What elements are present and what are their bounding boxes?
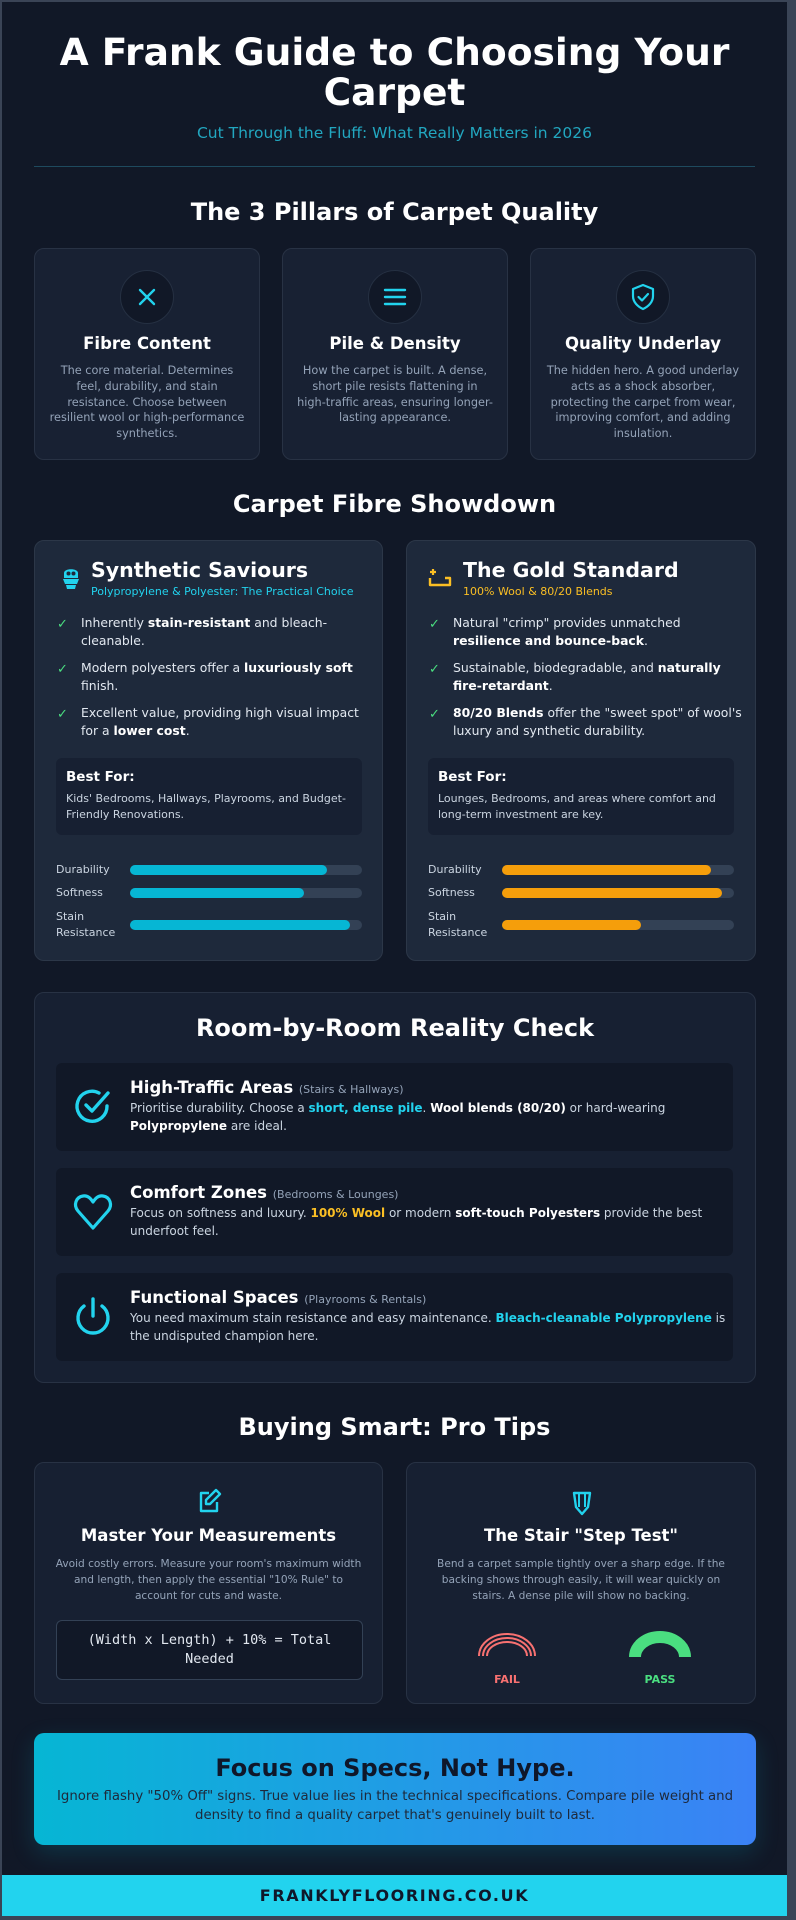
- best for: [56, 758, 362, 835]
- row: functional: Functional Spaces (Playrooms & Rentals): [130, 1288, 426, 1307]
- panel: measurements: [34, 1462, 383, 1704]
- callout: [34, 1733, 756, 1845]
- panel: gold standard: The Gold Standard: [463, 558, 679, 582]
- panel: gold standard: 80/20 Blends offer the "sweet spot" of wool's luxury and synthetic durability.: [453, 705, 742, 738]
- icon: power: [76, 1297, 110, 1335]
- panel: synthetic: Polypropylene & Polyester: The Practical Choice: [91, 585, 353, 598]
- panel: step test: The Stair "Step Test": [484, 1526, 678, 1545]
- subtitle: Cut Through the Fluff: What Really Matters in 2026: [197, 124, 592, 142]
- title: [60, 30, 730, 114]
- row: comfort: [56, 1168, 733, 1256]
- bar chart: synthetic: Softness: [56, 886, 103, 899]
- panel: room by room: [34, 992, 756, 1383]
- panel: gold standard: [406, 540, 756, 961]
- icon: lines: [368, 270, 422, 324]
- icon: heart: [74, 1194, 112, 1230]
- icon: fail arc: FAIL: [494, 1673, 520, 1686]
- heading: Room-by-Room Reality Check: [196, 1014, 594, 1042]
- best for: [428, 758, 734, 835]
- icon: edit: [200, 1488, 222, 1512]
- row: high traffic: [56, 1063, 733, 1151]
- card: pile density: Pile & Density: [329, 334, 461, 353]
- icon: shield: [616, 270, 670, 324]
- bar chart: wool: Softness: [428, 886, 475, 899]
- row: comfort: Comfort Zones (Bedrooms & Lounges): [130, 1183, 398, 1202]
- panel: synthetic: Inherently stain-resistant and bleach-cleanable.: [81, 615, 327, 648]
- best for: Best For:: [66, 769, 135, 785]
- row: high traffic: Prioritise durability. Choose a short, dense pile. Wool blends (80/20) or hard-wearing Polypropylene are ideal.: [130, 1101, 665, 1133]
- row: comfort: Focus on softness and luxury. 100% Wool or modern soft-touch Polyesters provide the best underfoot feel.: [130, 1206, 702, 1238]
- card: pile density: How the carpet is built. A dense, short pile resists flattening in high-traffic areas, ensuring longer-lasting appearance.: [297, 364, 493, 424]
- panel: gold standard: Sustainable, biodegradable, and naturally fire-retardant.: [453, 660, 721, 693]
- icon: pass arc: PASS: [645, 1673, 675, 1686]
- icon: gold: [428, 569, 452, 586]
- panel: synthetic: Synthetic Saviours: [91, 558, 308, 582]
- card: fibre content: The core material. Determines feel, durability, and stain resistance. Choose between resilient wool or high-performance synthetics.: [50, 364, 244, 440]
- bar chart: wool: Durability: [428, 863, 482, 876]
- row: functional: You need maximum stain resistance and easy maintenance. Bleach-cleanable Polypropylene is the undisputed champion here.: [130, 1311, 725, 1343]
- panel: gold standard: 100% Wool & 80/20 Blends: [463, 585, 613, 598]
- card: fibre content: Fibre Content: [83, 334, 211, 353]
- icon: pass arc: [629, 1631, 691, 1686]
- card: pile density: [282, 248, 508, 460]
- heading: fibre showdown: Carpet Fibre Showdown: [233, 490, 556, 518]
- panel: synthetic: [34, 540, 383, 961]
- best for: Best For:: [438, 769, 507, 785]
- formula: Needed: [185, 1651, 234, 1667]
- panel: measurements: account for cuts and waste.: [135, 1590, 282, 1602]
- bar chart: synthetic: Stain: [56, 910, 84, 923]
- footer: [2, 1875, 787, 1916]
- panel: measurements: Avoid costly errors. Measure your room's maximum width: [56, 1558, 361, 1570]
- icon: fail arc: [478, 1633, 536, 1686]
- card: underlay: Quality Underlay: [565, 334, 721, 353]
- panel: measurements: Master Your Measurements: [81, 1526, 336, 1545]
- panel: step test: Bend a carpet sample tightly over a sharp edge. If the backing shows through easily, it will wear quickly on stairs. A dense pile will show no backing.: [437, 1558, 725, 1602]
- panel: synthetic: Modern polyesters offer a luxuriously soft finish.: [81, 660, 353, 693]
- card: underlay: [530, 248, 756, 460]
- panel: step test: [406, 1462, 756, 1704]
- heading: pro tips: Buying Smart: Pro Tips: [239, 1413, 550, 1441]
- panel: measurements: and length, then apply the essential "10% Rule" to: [74, 1574, 343, 1586]
- title: Carpet: [324, 70, 465, 114]
- row: functional: [56, 1273, 733, 1361]
- callout: Focus on Specs, Not Hype.: [215, 1754, 575, 1782]
- panel: synthetic: Excellent value, providing high visual impact for a lower cost.: [81, 705, 359, 738]
- panel: pillars: [34, 248, 756, 460]
- bar chart: synthetic: [56, 863, 362, 939]
- icon: stair: [572, 1492, 592, 1516]
- icon: synthetic: [63, 569, 79, 589]
- heading: 3 pillars: The 3 Pillars of Carpet Quality: [191, 198, 598, 226]
- bar chart: wool: Resistance: [428, 926, 487, 939]
- bar chart: wool: Stain: [428, 910, 456, 923]
- card: underlay: The hidden hero. A good underlay acts as a shock absorber, protecting the carpet from wear, improving comfort, and adding insulation.: [547, 364, 739, 440]
- panel: gold standard: Natural "crimp" provides unmatched resilience and bounce-back.: [453, 615, 681, 648]
- formula: (Width x Length) + 10% = Total: [88, 1632, 331, 1648]
- icon: check circle: [75, 1090, 110, 1123]
- title: A Frank Guide to Choosing Your: [60, 30, 729, 74]
- callout: Ignore flashy "50% Off" signs. True value lies in the technical specifications. Compare pile weight and density to find a quality carpet that's genuinely built to last.: [57, 1789, 733, 1822]
- bar chart: wool: [428, 863, 734, 939]
- footer: FRANKLYFLOORING.CO.UK: [260, 1886, 529, 1905]
- bar chart: synthetic: Resistance: [56, 926, 115, 939]
- best for: Kids' Bedrooms, Hallways, Playrooms, and Budget-Friendly Renovations.: [66, 792, 346, 821]
- card: fibre content: [34, 248, 260, 460]
- row: high traffic: High-Traffic Areas (Stairs & Hallways): [130, 1078, 404, 1097]
- best for: Lounges, Bedrooms, and areas where comfort and long-term investment are key.: [438, 792, 716, 821]
- formula: [56, 1620, 363, 1680]
- bar chart: synthetic: Durability: [56, 863, 110, 876]
- icon: x: [120, 270, 174, 324]
